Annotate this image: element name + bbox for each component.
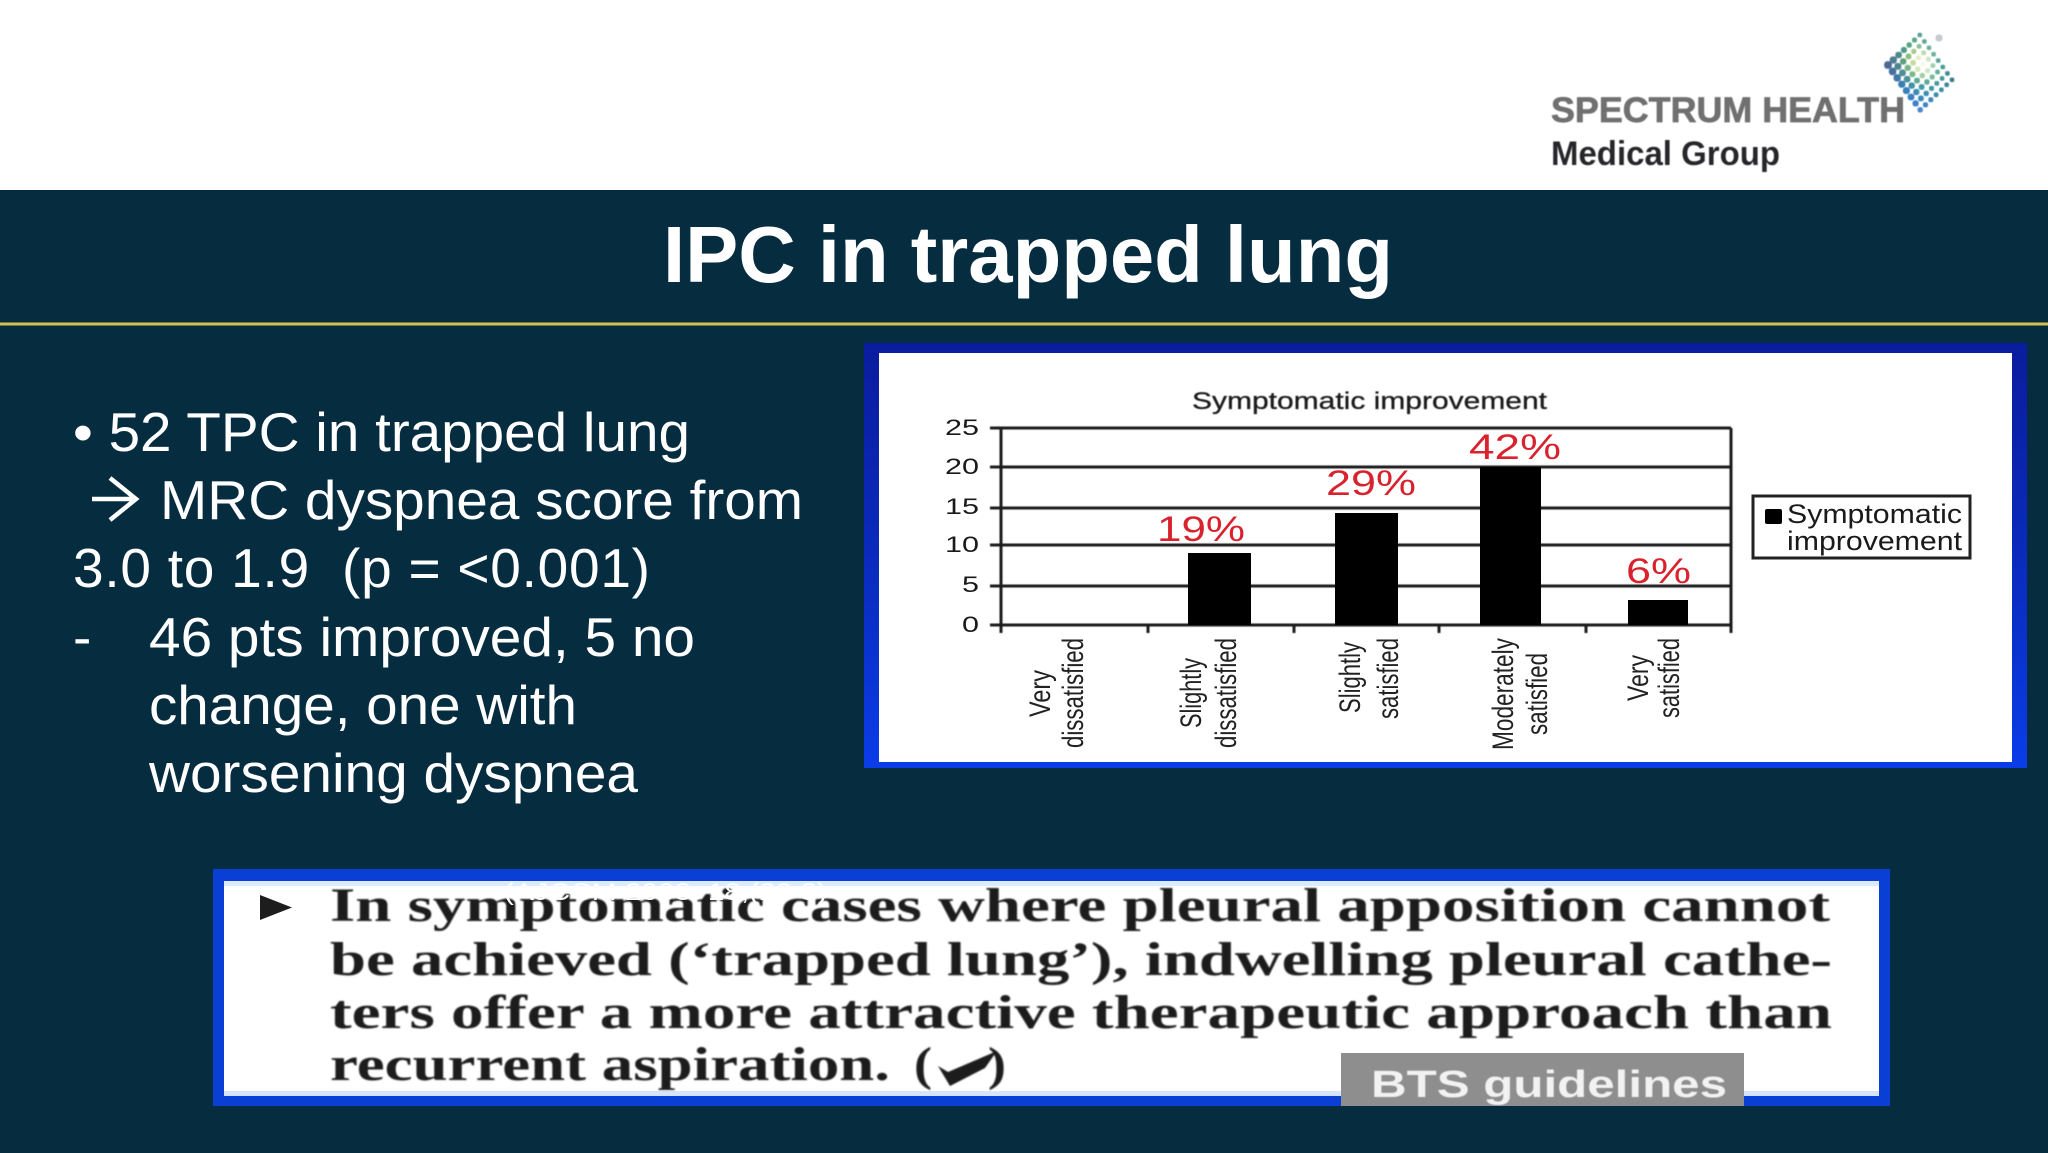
- sub-bullet: patient outcomes: change, one with: [149, 674, 577, 736]
- category labels: Very: [1622, 655, 1655, 701]
- label: BTS guidelines: [1341, 1053, 1744, 1106]
- percent labels: [1157, 428, 1691, 591]
- text block: trapped lung results: [73, 401, 803, 804]
- category labels: Slightly: [1175, 658, 1208, 728]
- guideline quote: [330, 879, 1832, 1091]
- sub-bullet: patient outcomes: [148, 606, 695, 804]
- check mark in parentheses: [914, 1038, 1006, 1091]
- percent labels: 42%: [1469, 428, 1561, 467]
- label: BTS guidelines: BTS guidelines: [1371, 1064, 1727, 1106]
- category labels: Moderately: [1487, 638, 1520, 750]
- sub-bullet: patient outcomes: worsening dyspnea: [148, 742, 638, 804]
- guideline quote: recurrent aspiration.: [330, 1038, 890, 1091]
- category labels: satisfied: [1372, 638, 1405, 719]
- guideline quote: In symptomatic cases where pleural apposition cannot: [330, 879, 1830, 932]
- logo: Spectrum Health Medical Group: [1551, 33, 1954, 173]
- logo wordmark: Spectrum Health: SPECTRUM HEALTH: [1551, 91, 1905, 130]
- check mark in parentheses: (: [914, 1038, 932, 1091]
- line: score values and p value: 3.0 to 1.9 (p = <0.001): [73, 537, 650, 599]
- category labels: dissatisfied: [1210, 638, 1243, 748]
- bullet: 52 TPC in trapped lung: • 52 TPC in trapped lung: [73, 401, 690, 463]
- legend: Symptomatic: [1787, 499, 1962, 529]
- y axis labels: 5: [962, 572, 979, 597]
- guideline quote: ters offer a more attractive therapeutic approach than: [330, 986, 1832, 1039]
- chart title: Symptomatic improvement: [1192, 388, 1547, 415]
- percent labels: 19%: [1157, 510, 1245, 549]
- panel: BTS guideline excerpt: [213, 869, 1890, 1106]
- category labels: satisfied: [1653, 638, 1686, 718]
- category labels: [1024, 638, 1686, 750]
- legend: improvement: [1787, 526, 1963, 556]
- legend: [1753, 496, 1970, 558]
- ghost citation text: (AJCCM 2003; 18;(20 3): [504, 879, 827, 906]
- check mark in parentheses: ): [988, 1038, 1006, 1091]
- logo wordmark: Medical Group: Medical Group: [1551, 135, 1780, 173]
- panel: symptomatic improvement chart: [864, 343, 2027, 768]
- y axis labels: 25: [945, 415, 979, 440]
- arrow: [92, 478, 136, 520]
- bar chart: [945, 415, 1731, 750]
- title: IPC in trapped lung: [663, 210, 1393, 299]
- category labels: Slightly: [1334, 642, 1367, 713]
- dash: -: [73, 606, 91, 668]
- category labels: dissatisfied: [1057, 638, 1090, 748]
- y axis labels: 10: [945, 532, 979, 557]
- y axis labels: 20: [945, 454, 979, 479]
- category labels: satisfied: [1521, 653, 1554, 735]
- logo icon: dotted diamond: [1885, 33, 1954, 112]
- percent labels: 29%: [1326, 464, 1416, 503]
- y axis labels: [945, 415, 979, 637]
- guideline quote: be achieved (‘trapped lung’), indwelling pleural cathe-: [330, 933, 1832, 986]
- line: MRC dyspnea score: MRC dyspnea score from: [160, 469, 803, 531]
- y axis labels: 0: [962, 612, 979, 637]
- y axis labels: 15: [945, 494, 979, 519]
- percent labels: 6%: [1626, 552, 1691, 591]
- triangle marker: [260, 895, 292, 920]
- sub-bullet: patient outcomes: 46 pts improved, 5 no: [149, 606, 695, 668]
- bars: [1188, 467, 1688, 625]
- category labels: Very: [1024, 670, 1057, 717]
